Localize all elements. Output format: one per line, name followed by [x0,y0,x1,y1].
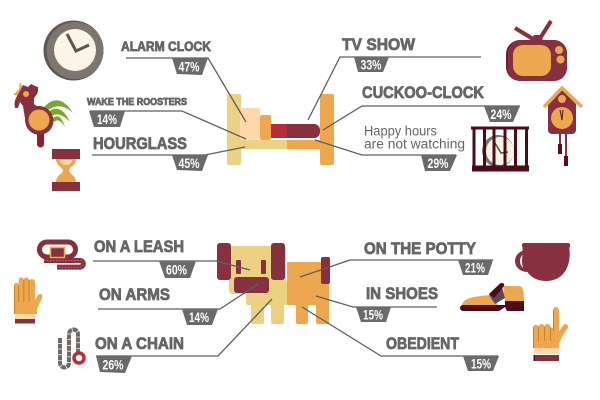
percent badge: 21%: 21% [465,260,485,276]
percent badge: 47%: 47% [178,58,200,74]
label: happy hours are not watching: Happy hours [364,124,437,138]
icon: clock in a cage [471,126,529,172]
icon: raised hand [14,277,42,324]
leader line: tv show [308,57,481,120]
label: on arms: ON ARMS [99,285,170,304]
percent badge: 15%: 15% [471,356,491,372]
item: alarm clock [121,39,246,122]
label: cuckoo-clock: CUCKOO-CLOCK [362,83,485,102]
percent badge: 14%: 14% [189,309,209,325]
icon: pointing hand [533,307,568,361]
icon: leash [40,242,83,267]
leader line: arms [98,284,258,309]
icon: cuckoo clock [544,88,582,166]
percent badge: 14%: 14% [97,111,117,127]
illustration: dog [217,243,330,324]
leader line: happy hours [315,140,456,155]
item: happy hours [315,124,465,171]
icon: hourglass [52,149,80,191]
item: tv show [308,35,481,120]
item: on a chain [95,299,272,373]
label: hourglass: HOURGLASS [93,134,187,153]
leader line: potty [300,260,493,277]
item: on a leash [93,237,250,278]
icon: potty [515,243,570,281]
icon: retro tv [506,21,567,81]
label: alarm clock: ALARM CLOCK [121,39,211,54]
item: on arms [98,284,258,325]
label: on a leash: ON A LEASH [94,237,184,256]
label: happy hours are not watching: are not watching [364,136,465,152]
percent badge: 15%: 15% [363,306,383,322]
item: in shoes [316,284,438,322]
percent badge: 24%: 24% [490,106,512,122]
icon: chain [60,330,84,368]
label: on the potty: ON THE POTTY [364,239,477,258]
leader line: hourglass [92,147,245,155]
icon: wall clock [44,20,104,80]
item: wake the roosters [87,97,246,139]
label: on a chain: ON A CHAIN [95,334,184,353]
label: wake the roosters: WAKE THE ROOSTERS [87,97,187,108]
item: obedient [302,307,499,372]
percent badge: 26%: 26% [102,356,124,372]
percent badge: 29%: 29% [428,155,449,171]
leader line: chain [96,299,272,356]
percent badge: 33%: 33% [360,56,382,72]
icon: rooster [13,82,73,148]
label: tv show: TV SHOW [342,35,416,54]
item: hourglass [92,134,245,171]
leader line: alarm clock [126,58,246,122]
item: on the potty [300,239,493,277]
item: cuckoo-clock [323,83,520,130]
illustration: bed [227,94,334,165]
label: obedient: OBEDIENT [386,334,460,353]
percent badge: 60%: 60% [166,262,187,278]
leader line: cuckoo-clock [323,106,520,130]
leader line: shoes [316,296,437,307]
label: in shoes: IN SHOES [366,284,438,303]
leader line: obedient [302,307,498,356]
leader line: leash [93,261,250,270]
percent badge: 45%: 45% [178,155,200,171]
leader line: roosters [90,111,246,139]
icon: shoe [460,283,524,311]
